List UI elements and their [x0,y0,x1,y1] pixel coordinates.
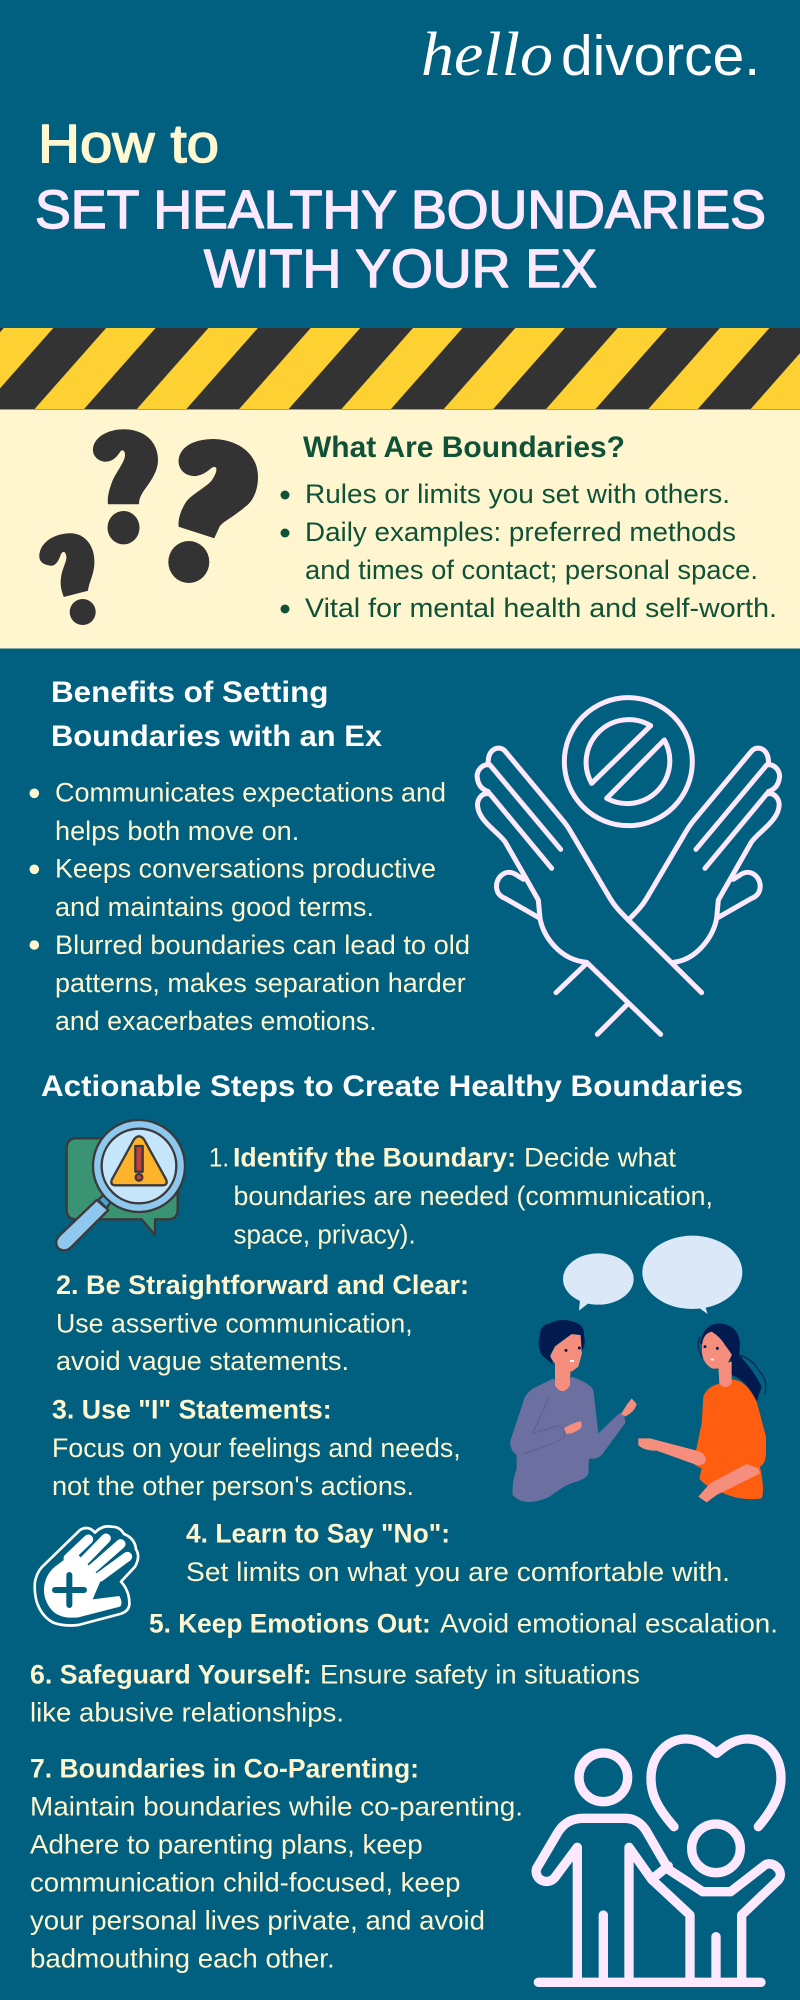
logo: hello divorce [421,21,760,89]
icon: hand with plus [35,1526,138,1625]
step 7: 7. Boundaries in Co-Parenting: [30,1753,419,1783]
step 7: Adhere to parenting plans, keep [30,1830,423,1860]
title: SET HEALTHY BOUNDARIES [35,181,766,240]
title [35,115,766,299]
step 1: boundaries are needed (communication, [234,1181,713,1211]
title: WITH YOUR EX [204,240,597,299]
woman [638,1323,766,1502]
step 4: Set limits on what you are comfortable with. [186,1557,730,1587]
icon: question marks [39,429,258,625]
bullet list: benefits: and exacerbates emotions. [55,1006,377,1036]
man [510,1320,637,1502]
heading: benefits: Benefits of Setting [51,676,328,709]
step 3: Focus on your feelings and needs, [52,1433,461,1463]
title: How to [38,115,219,174]
bullet list: definition: Daily examples: preferred methods [305,517,736,547]
bullet list: benefits: Blurred boundaries can lead to old [55,930,470,960]
step 6: like abusive relationships. [30,1698,344,1728]
heading: actionable steps: Actionable Steps to Create Healthy Boundaries [41,1070,743,1103]
step 3 [52,1395,461,1501]
bullet list: benefits: and maintains good terms. [55,892,374,922]
speech bubbles [563,1236,742,1314]
heading: benefits: Boundaries with an Ex [51,720,383,753]
icon: magnifier with warning [56,1120,185,1250]
panel: what are boundaries [0,410,800,648]
step 6 [30,1659,640,1728]
step 1: Identify the Boundary: [233,1143,516,1173]
step 5 [149,1609,778,1639]
illustration: two people talking [510,1236,766,1502]
step 1 [209,1143,713,1249]
step 2: Use assertive communication, [56,1308,413,1338]
step 1: Decide what [524,1143,676,1173]
icon: parent and child with heart [536,1739,781,1982]
step 3: 3. Use "I" Statements: [52,1395,332,1425]
bullet list: definition [280,479,777,623]
step 7: your personal lives private, and avoid [30,1905,485,1935]
step 5: 5. Keep Emotions Out: [149,1609,431,1639]
step 7: Maintain boundaries while co-parenting. [30,1792,523,1822]
logo: hello divorce: hello [421,21,553,89]
step 1: space, privacy). [234,1219,416,1249]
bullet list: definition: Vital for mental health and self-worth. [305,593,777,623]
step 6: Ensure safety in situations [320,1659,640,1689]
icon: crossed hands with stop sign [477,698,780,1034]
bullet list: definition: Rules or limits you set with others. [305,479,730,509]
heading: what are boundaries: What Are Boundaries? [303,431,625,464]
step 4: 4. Learn to Say "No": [186,1519,450,1549]
bullet list: benefits: Keeps conversations productive [55,854,436,884]
step 2 [56,1270,469,1376]
step 1: 1. [209,1143,229,1173]
bullet list: benefits: helps both move on. [55,816,299,846]
bullet list: definition: and times of contact; personal space. [305,555,758,585]
step 7: communication child-focused, keep [30,1868,460,1898]
bullet list: benefits: Communicates expectations and [55,778,446,808]
caution tape stripe band [0,328,800,409]
step 4 [186,1519,730,1587]
step 2: avoid vague statements. [56,1346,349,1376]
logo: hello divorce: divorce. [561,24,760,88]
step 7: badmouthing each other. [30,1943,335,1973]
heading: benefits [51,676,383,753]
step 6: 6. Safeguard Yourself: [30,1659,312,1689]
step 2: 2. Be Straightforward and Clear: [56,1270,469,1300]
bullet list: benefits: patterns, makes separation harder [55,968,466,998]
bullet list: benefits [30,778,470,1036]
step 7 [30,1753,523,1973]
step 3: not the other person's actions. [52,1471,414,1501]
step 5: Avoid emotional escalation. [440,1609,778,1639]
